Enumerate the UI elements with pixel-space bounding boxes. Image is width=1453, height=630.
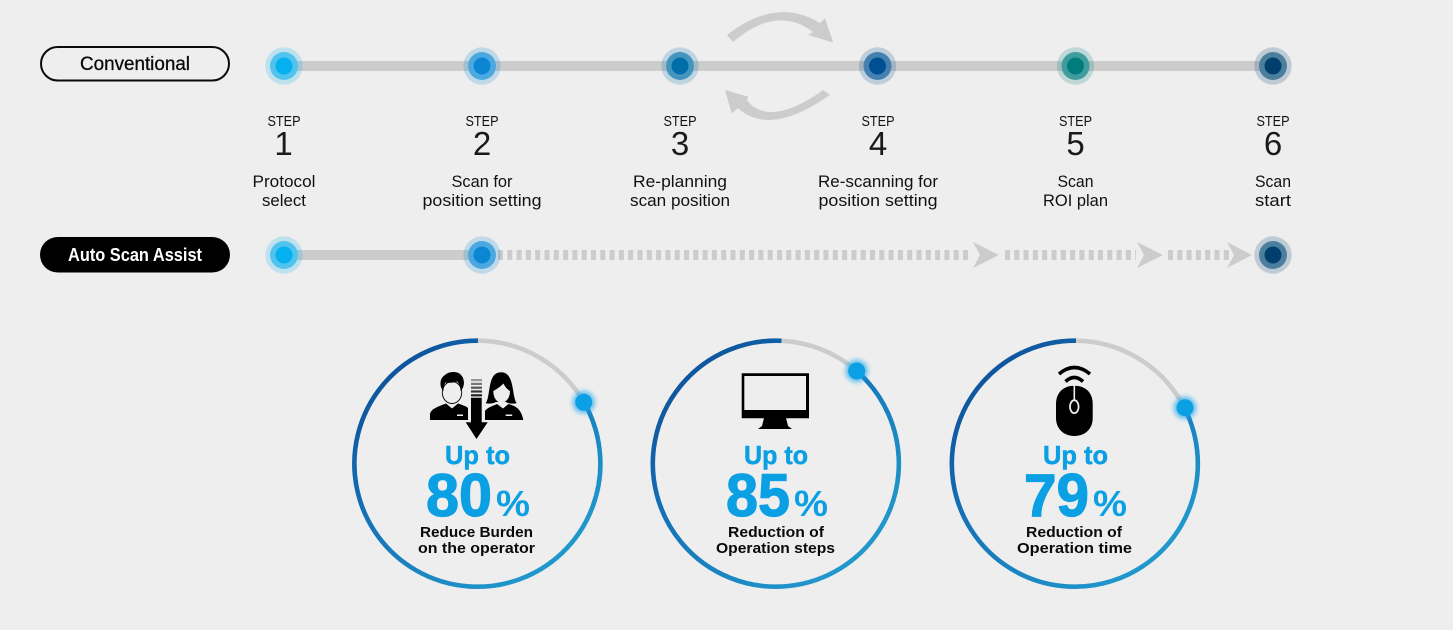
progress ring — [653, 341, 899, 587]
step 6 text — [1255, 114, 1291, 210]
arrow: forward loop — [727, 12, 833, 43]
arrow: backward loop — [725, 90, 830, 120]
auto step 2 node — [463, 236, 501, 274]
stat text: Up to — [1043, 440, 1108, 470]
step 6 text: 6 — [1264, 125, 1282, 162]
auto step 6 node — [1254, 236, 1292, 274]
stat text — [418, 440, 535, 557]
step 5 text: Scan — [1058, 172, 1094, 191]
panel: 79% reduction of time — [952, 341, 1198, 587]
step 3 text: Re-planning — [633, 172, 727, 191]
icon: monitor — [742, 373, 809, 429]
stat text: 79 — [1024, 462, 1089, 529]
step 2 text — [422, 114, 542, 210]
stat text: Operation steps — [716, 540, 835, 557]
step 2 text: Scan for — [452, 172, 513, 191]
label: Conventional — [41, 47, 229, 80]
stat text: % — [496, 483, 530, 524]
step 4 text: 4 — [869, 125, 887, 162]
step 1 text: select — [262, 191, 306, 210]
stat text: 80 — [426, 462, 492, 529]
step 4 text: STEP — [862, 114, 894, 130]
icon: operators with down arrow — [430, 372, 523, 439]
step 3 text — [630, 114, 730, 210]
auto scan timeline — [265, 236, 1292, 274]
label: Conventional: Conventional — [80, 54, 190, 75]
step 1 node — [265, 47, 303, 85]
step 5 text — [1043, 114, 1108, 210]
step 4 text: Re-scanning for — [818, 172, 938, 191]
stat text: Up to — [744, 440, 808, 470]
step 2 text: 2 — [473, 125, 491, 162]
arrow: chevron 1 — [973, 242, 999, 268]
step 2 node — [463, 47, 501, 85]
label: Auto Scan Assist: Auto Scan Assist — [68, 245, 202, 265]
step 3 text: 3 — [671, 125, 689, 162]
stat text: Operation time — [1017, 540, 1132, 557]
step 3 node — [661, 47, 699, 85]
label: Auto Scan Assist — [40, 237, 230, 272]
stat text — [1017, 440, 1132, 557]
step 2 text: position setting — [422, 191, 542, 210]
panel: 85% reduction of steps — [653, 341, 899, 587]
stat text: Reduction of — [728, 524, 825, 541]
step 5 text: STEP — [1059, 114, 1092, 130]
step 1 text: 1 — [274, 125, 293, 162]
stat text: 85 — [726, 462, 790, 529]
arrow: chevron 2 — [1137, 242, 1163, 268]
panel: 80% reduce burden — [354, 341, 600, 587]
stat text: on the operator — [418, 540, 535, 557]
step 1 text: Protocol — [252, 172, 316, 191]
stat text: % — [794, 483, 828, 524]
step 1 text: STEP — [268, 114, 300, 130]
progress ring — [354, 341, 600, 587]
stat text: Reduce Burden — [420, 524, 533, 541]
skipped steps dashed track — [498, 250, 1233, 260]
step 4 text: position setting — [818, 191, 938, 210]
step 4 text — [818, 114, 938, 210]
icon: wireless mouse — [1056, 368, 1093, 436]
step 6 node — [1254, 47, 1292, 85]
auto step 1 node — [265, 236, 303, 274]
step 1 text — [252, 114, 316, 210]
stat text — [716, 440, 835, 557]
step 6 text: start — [1255, 191, 1291, 210]
step 5 text: 5 — [1066, 125, 1085, 162]
step 3 text: STEP — [664, 114, 696, 130]
conventional timeline — [265, 47, 1292, 85]
arrow: chevron 3 — [1227, 242, 1252, 268]
step 2 text: STEP — [466, 114, 498, 130]
step 4 node — [859, 47, 896, 85]
step 3 text: scan position — [630, 191, 730, 210]
progress ring — [952, 341, 1198, 587]
step 6 text: Scan — [1255, 172, 1291, 191]
step 6 text: STEP — [1256, 114, 1290, 130]
step 5 node — [1057, 47, 1094, 85]
stat text: Reduction of — [1026, 524, 1123, 541]
stat text: Up to — [445, 440, 510, 470]
step 5 text: ROI plan — [1043, 191, 1108, 210]
stat text: % — [1093, 483, 1127, 524]
